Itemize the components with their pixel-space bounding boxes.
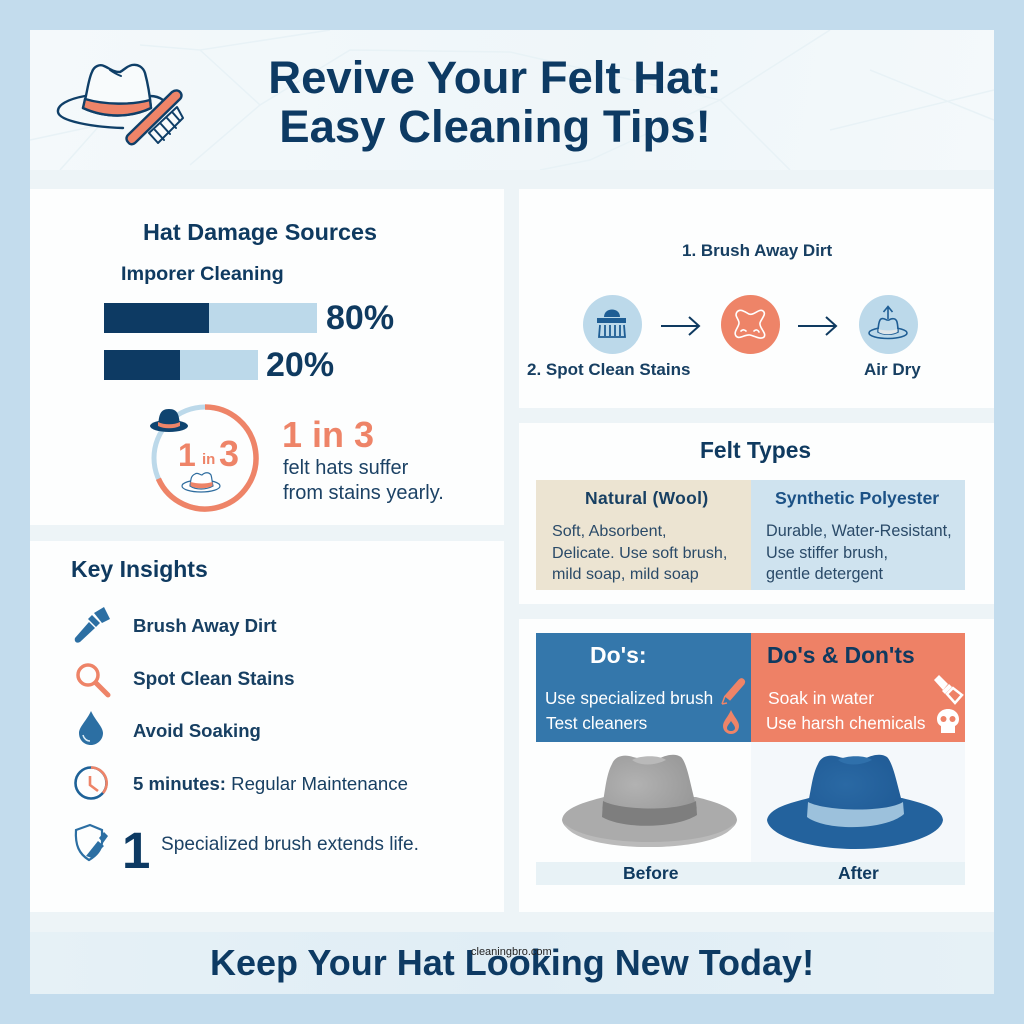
donut: 1 in 3 with hats: 1 (178, 437, 196, 473)
panel: process steps (519, 189, 994, 408)
icon: hat and brush (56, 64, 184, 146)
icon: stain step (721, 295, 780, 354)
panel: key insights (30, 541, 504, 912)
card: natural wool (536, 480, 751, 590)
icon: brush step (583, 295, 642, 354)
donut: 1 in 3 with hats: in (202, 451, 215, 468)
hat dark (150, 409, 188, 432)
heading: key insights: Key Insights (71, 556, 208, 582)
before image area (562, 754, 737, 847)
panel: felt types (519, 423, 994, 604)
bar chart: 80 percent: 80% (326, 299, 394, 337)
hat: before (562, 754, 737, 847)
card: donts (751, 633, 965, 742)
caption strip: before and after: Before (623, 863, 678, 883)
heading: felt types: Felt Types (700, 437, 811, 463)
number 1: 1 (122, 822, 150, 879)
icon: skull (937, 709, 959, 733)
label: spot clean stains: 2. Spot Clean Stains (527, 360, 690, 379)
caption strip: before and after: After (838, 863, 879, 883)
bar chart: 80 percent (104, 299, 394, 337)
arrow (798, 316, 838, 336)
panel: dos and donts (519, 619, 994, 912)
hat: after (767, 754, 943, 849)
bar chart: 20 percent (104, 346, 334, 384)
text: avoid soaking: Avoid Soaking (133, 720, 261, 741)
card: synthetic polyester: Use stiffer brush, (766, 544, 888, 562)
card: dos (536, 633, 751, 742)
card: donts: Do's & Don'ts (767, 642, 915, 668)
after image area (751, 742, 965, 862)
card: natural wool: Delicate. Use soft brush, (552, 544, 727, 562)
icon: brush white (934, 675, 964, 705)
footer banner (30, 932, 994, 994)
arrow (661, 316, 700, 336)
card: dos: Test cleaners (546, 713, 647, 733)
text: 5 minutes regular maintenance: 5 minutes: Regular Maintenance (133, 773, 408, 794)
stat caption: felt hats suffer (283, 457, 408, 479)
panel: hat damage sources (30, 189, 504, 525)
card: dos: Do's: (590, 642, 647, 668)
donut: 1 in 3 with hats: 3 (219, 433, 239, 474)
caption strip: before and after (536, 862, 965, 885)
card: synthetic polyester: gentle detergent (766, 565, 883, 583)
card: natural wool: Natural (Wool) (585, 488, 708, 508)
text: brush away dirt: Brush Away Dirt (133, 615, 277, 636)
label: improper cleaning: Imporer Cleaning (121, 263, 284, 285)
stat caption (283, 457, 444, 504)
card: natural wool: mild soap, mild soap (552, 565, 699, 583)
icon: pen (721, 678, 746, 705)
footer text: Keep Your Hat Looking New Today! (210, 942, 814, 983)
icon: shield with brush (74, 824, 108, 862)
heading: hat damage sources: Hat Damage Sources (143, 219, 377, 245)
icon: flame drop (723, 710, 739, 734)
icon: brush (74, 607, 110, 643)
hat light (182, 473, 220, 492)
icon: water drop (79, 711, 103, 745)
header banner (30, 30, 994, 170)
bar chart: 20 percent: 20% (266, 346, 334, 384)
card: natural wool: Soft, Absorbent, (552, 522, 667, 540)
card: donts: Use harsh chemicals (766, 713, 926, 733)
icon: clock (74, 766, 108, 800)
text: specialized brush extends life: Specialized brush extends life. (161, 834, 419, 855)
card: synthetic polyester (751, 480, 965, 590)
title: Revive Your Felt Hat: (268, 52, 722, 103)
icon: air dry step (859, 295, 918, 354)
watermark: cleaningbro.com (471, 946, 552, 958)
stat caption: from stains yearly. (283, 482, 444, 504)
text: spot clean stains: Spot Clean Stains (133, 669, 295, 690)
card: donts: Soak in water (768, 688, 874, 708)
heading: step 1: 1. Brush Away Dirt (682, 241, 832, 260)
donut: 1 in 3 with hats (150, 404, 259, 512)
title (268, 52, 722, 152)
stat: 1 in 3: 1 in 3 (282, 414, 374, 455)
label: air dry: Air Dry (864, 360, 921, 379)
card: synthetic polyester: Durable, Water-Resistant, (766, 522, 952, 540)
card: dos: Use specialized brush (545, 688, 713, 708)
title: Easy Cleaning Tips! (279, 101, 711, 152)
icon: magnifier (76, 663, 110, 698)
card: synthetic polyester: Synthetic Polyester (775, 488, 939, 508)
